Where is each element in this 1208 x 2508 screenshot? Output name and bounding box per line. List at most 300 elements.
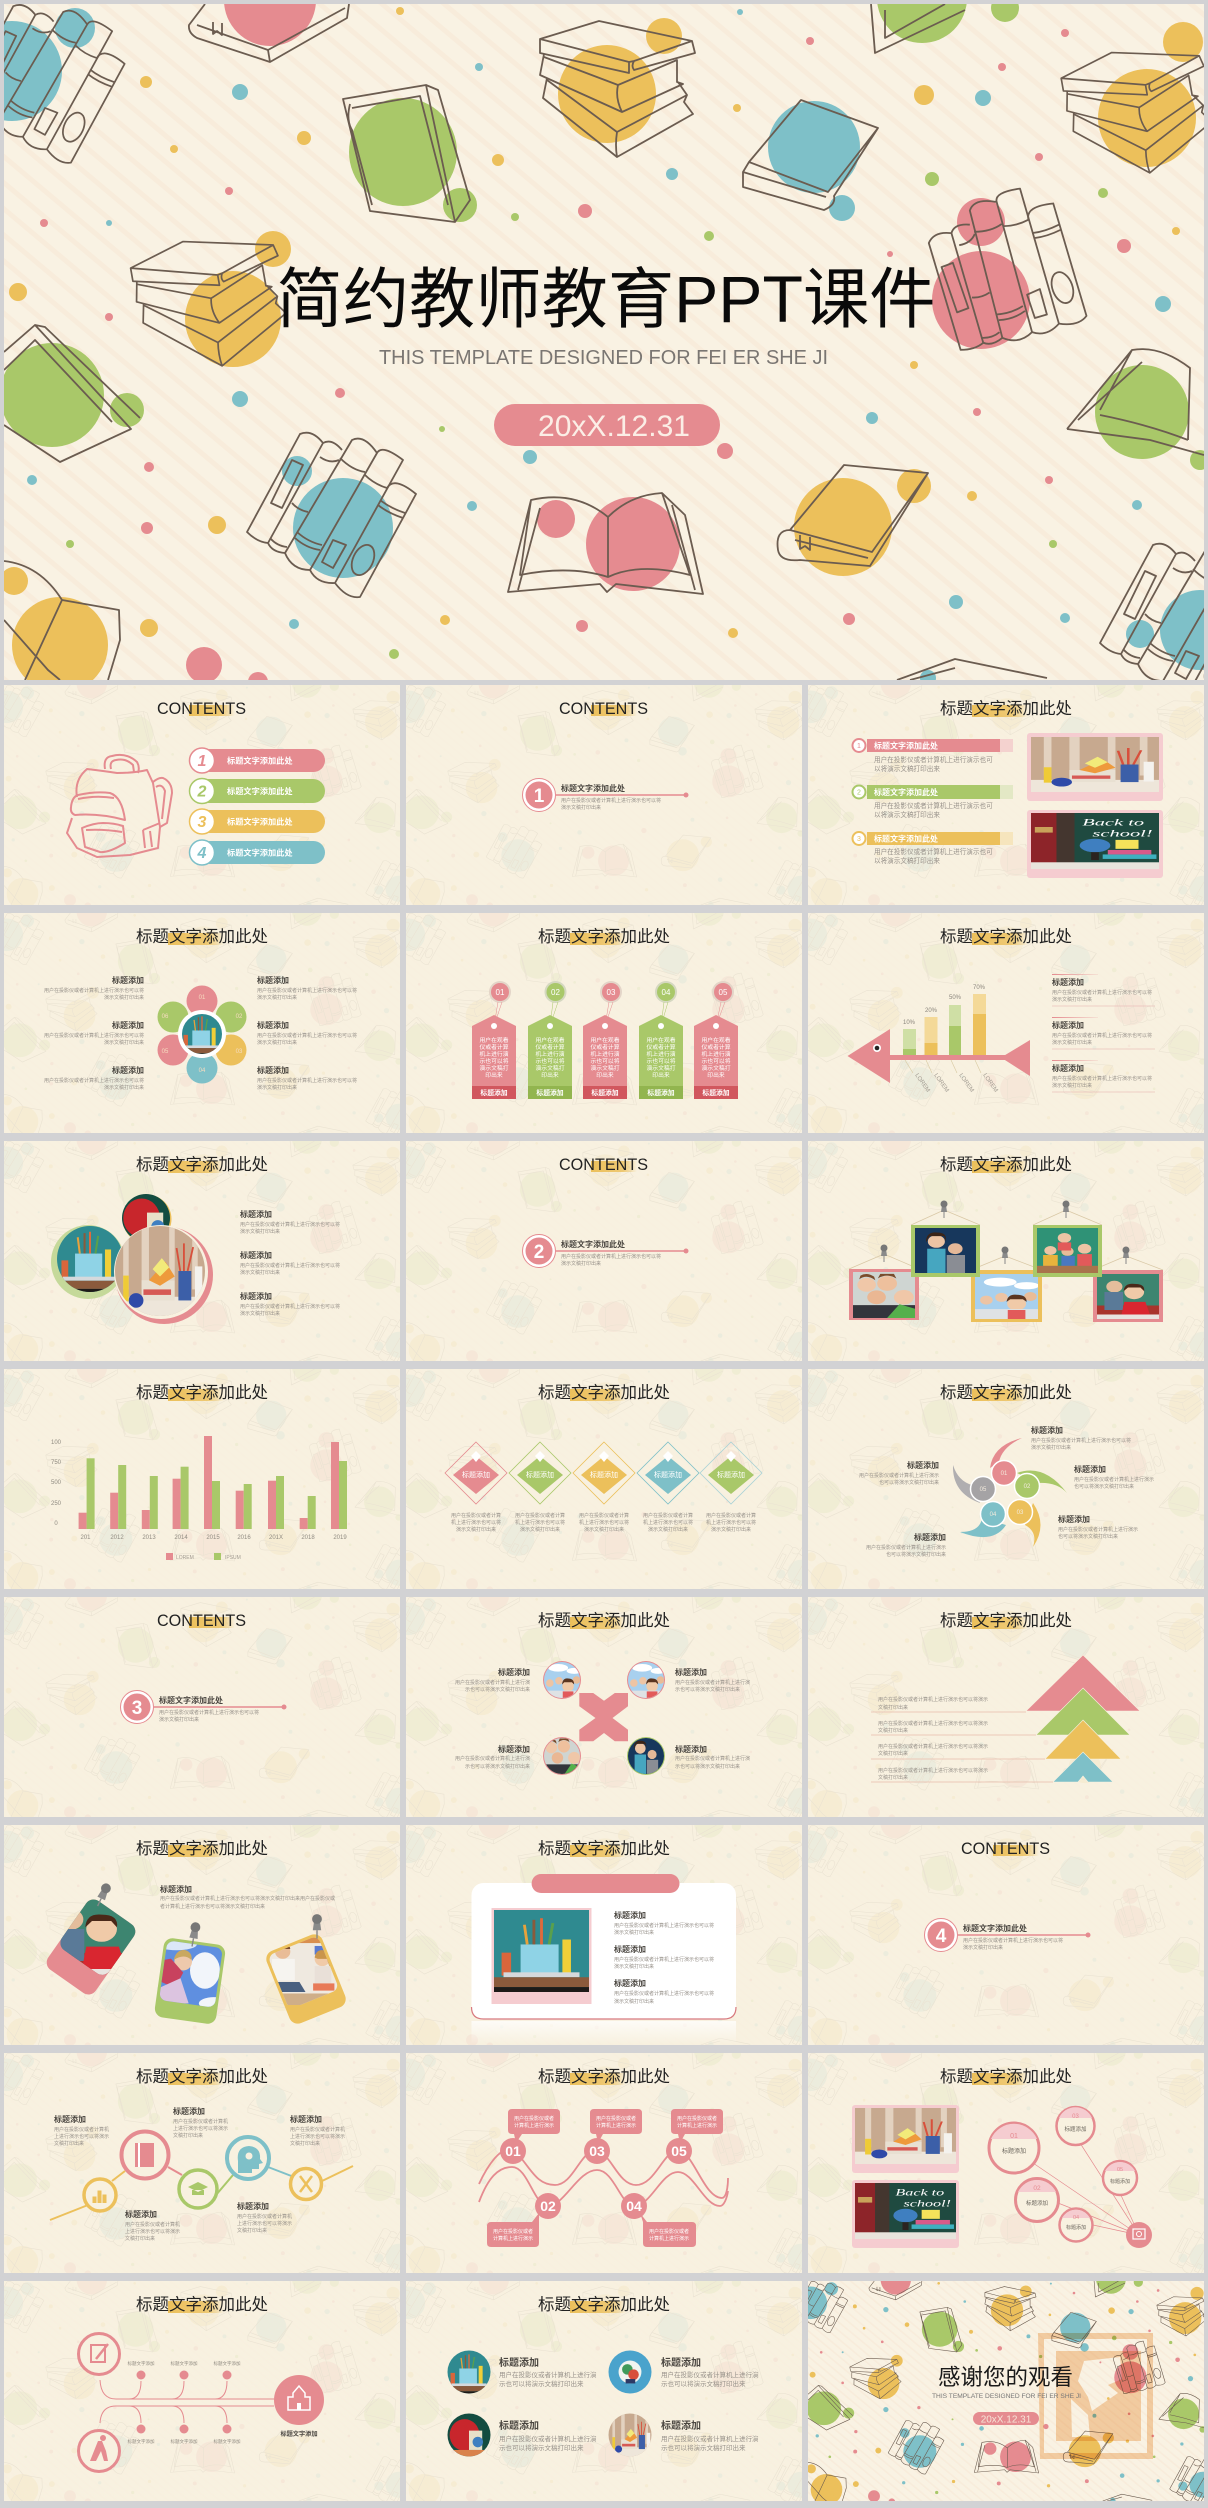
panel: slide 9 pinned photo wall xyxy=(794,1124,1208,1370)
left labels: 用户在投影仪或者计算机上进行演示也可以将 xyxy=(44,987,144,994)
diamond 4: 标题添加 xyxy=(654,1470,682,1479)
tag 05: 仪或者计算 xyxy=(702,1043,731,1051)
text rows: 文稿打印出来 xyxy=(878,1704,908,1711)
panel: slide 19 timeline rings xyxy=(0,2036,421,2282)
list item 3: 3 xyxy=(198,814,207,831)
tag 04: 印出来 xyxy=(652,1071,670,1079)
node numbers: 02 xyxy=(540,2198,556,2214)
tag 03: 用户在观看 xyxy=(590,1036,620,1044)
right text blocks: 标题添加 xyxy=(240,1291,272,1301)
y axis labels: 250 xyxy=(51,1501,62,1507)
text blocks xyxy=(54,2106,345,2242)
text blocks: 文稿打印出来 xyxy=(54,2140,84,2147)
item top right xyxy=(608,2350,759,2394)
heading: 标题文字添加此处 xyxy=(136,927,268,946)
right labels: 演示文稿打印出来 xyxy=(257,994,297,1001)
tag 03: 03 xyxy=(607,988,616,997)
text blocks: 演示文稿打印出来 xyxy=(614,1929,654,1936)
tag 02 xyxy=(528,981,572,1099)
card 2 xyxy=(154,1937,229,2025)
right text blocks: 标题添加 xyxy=(1052,1020,1084,1030)
right text blocks: 演示文稿打印出来 xyxy=(1052,1082,1092,1089)
item 1: 1 xyxy=(857,743,861,750)
callout text xyxy=(493,2115,717,2242)
callout text: 用户在投影仪或者 xyxy=(493,2228,533,2235)
ring yellow cross xyxy=(290,2168,322,2200)
section entry: 演示文稿打印出来 xyxy=(963,1944,1003,1951)
photo: pencils in cup xyxy=(492,1908,592,2004)
text rows: 用户在投影仪或者计算机上进行演示也可以将演示 xyxy=(878,1767,988,1774)
diamond captions: 机上进行演示也可以将 xyxy=(706,1519,756,1526)
x axis labels: 2018 xyxy=(301,1535,315,1541)
fishbone bars xyxy=(903,994,986,1055)
callout text: 计算机上进行演示 xyxy=(514,2122,554,2129)
labels: 用户在投影仪或者计算机上进行演示也可以将 xyxy=(1031,1437,1131,1444)
node numbers: 04 xyxy=(990,1512,997,1518)
text rows: 用户在投影仪或者计算机上进行演示也可以将演示 xyxy=(878,1743,988,1750)
text blocks: 标题添加 xyxy=(614,1944,646,1954)
bar value labels xyxy=(903,985,986,1026)
heading: 标题文字添加此处 xyxy=(136,1383,268,1402)
icon: backpack xyxy=(67,755,172,857)
pinwheel nodes xyxy=(970,1460,1040,1526)
text blocks: 用户在投影仪或者计算机上进行演示也可以将 xyxy=(614,1990,714,1997)
section entry: 用户在投影仪或者计算机上进行演示也可以将 xyxy=(963,1937,1063,1944)
ring pink book xyxy=(122,2132,168,2178)
labels: 用户在投影仪或者计算机上进行演 xyxy=(675,1755,750,1762)
legend: LOREM xyxy=(176,1555,194,1561)
white card xyxy=(472,1883,736,2019)
labels: 示也可以将演示文稿打印出来 xyxy=(675,1686,740,1693)
section entry: 3 xyxy=(132,1698,142,1719)
section entry: 标题文字添加此处 xyxy=(561,783,625,793)
heading: 标题文字添加此处 xyxy=(538,927,670,946)
bar value labels: 20% xyxy=(925,1008,938,1014)
right labels: 标题添加 xyxy=(257,975,289,985)
heading: 标题文字添加此处 xyxy=(538,1383,670,1402)
right labels: 标题添加 xyxy=(257,1065,289,1075)
item top right: 标题添加 xyxy=(661,2356,701,2369)
item 2: 2 xyxy=(857,790,861,796)
bottom dots and labels xyxy=(128,2424,241,2445)
labels: 用户在投影仪或者计算机上进行演 xyxy=(455,1679,530,1686)
text blocks: 用户在投影仪或者计算机 xyxy=(125,2221,180,2228)
item 1: 用户在投影仪或者计算机上进行演示也可 xyxy=(874,755,993,764)
tag 05: 05 xyxy=(719,988,728,997)
photo: yellow frame xyxy=(971,1270,1042,1322)
date pill xyxy=(973,2412,1039,2426)
x axis labels: 2016 xyxy=(237,1535,251,1541)
labels: 示也可以将演示文稿打印出来 xyxy=(675,1763,740,1770)
section entry xyxy=(120,1690,286,1724)
text rows: 文稿打印出来 xyxy=(878,1727,908,1734)
heading: CONTENTS xyxy=(559,1155,648,1174)
right text blocks xyxy=(1052,974,1155,1092)
text blocks: 文稿打印出来 xyxy=(290,2140,320,2147)
text blocks: 标题添加 xyxy=(125,2209,157,2219)
text blocks: 上进行演示也可以将演示 xyxy=(290,2133,345,2140)
callout text: 计算机上进行演示 xyxy=(677,2122,717,2129)
diamond 4 xyxy=(637,1442,699,1504)
bar value labels: 50% xyxy=(949,995,962,1001)
section entry: 用户在投影仪或者计算机上进行演示也可以将 xyxy=(561,1253,661,1260)
tag 01: 印出来 xyxy=(485,1071,503,1079)
photo: right pink frame xyxy=(1093,1270,1163,1322)
tag 01: 演示文稿打 xyxy=(480,1064,509,1072)
panel: slide 24 thank you xyxy=(794,2264,1208,2508)
tag 04 xyxy=(639,981,683,1099)
bottom dots and labels: 标题文字添加 xyxy=(214,2438,241,2445)
date pill: 20xX.12.31 xyxy=(538,410,690,443)
item 1: 标题文字添加此处 xyxy=(874,740,938,750)
x axis labels xyxy=(80,1535,347,1541)
tag 04: 用户在观看 xyxy=(646,1036,676,1044)
heading: 标题文字添加此处 xyxy=(940,2067,1072,2086)
ring green cap xyxy=(179,2170,217,2208)
large circle with building icon xyxy=(274,2375,324,2438)
diamond 1: 标题添加 xyxy=(462,1470,490,1479)
left labels: 标题添加 xyxy=(112,975,144,985)
item top left: 示也可以将演示文稿打印出来 xyxy=(499,2379,584,2388)
left labels: 用户在投影仪或者计算机上进行演示也可以将 xyxy=(44,1077,144,1084)
tag 02: 标题添加 xyxy=(536,1088,564,1097)
tag 02: 机上进行演 xyxy=(536,1050,565,1058)
text blocks: 标题添加 xyxy=(54,2114,86,2124)
subtitle: THIS TEMPLATE DESIGNED FOR FEI ER SHE JI xyxy=(379,347,828,369)
tag 01: 标题添加 xyxy=(480,1088,508,1097)
flower petals xyxy=(158,986,246,1084)
photo circle top left xyxy=(543,1661,582,1699)
list item 4: 标题文字添加此处 xyxy=(227,848,293,858)
ring yellow chart xyxy=(84,2179,116,2211)
right labels xyxy=(257,975,357,1091)
diamond captions: 机上进行演示也可以将 xyxy=(579,1519,629,1526)
item top left xyxy=(447,2350,597,2394)
section entry: 标题文字添加此处 xyxy=(963,1923,1027,1933)
flower petals: 05 xyxy=(162,1049,169,1055)
panel: slide 21 photos and node map xyxy=(794,2036,1208,2282)
node 04: 标题添加 xyxy=(1066,2224,1086,2231)
two wave lines xyxy=(479,2149,728,2206)
tag 04: 标题添加 xyxy=(647,1088,675,1097)
labels: 也可以将演示文稿打印出来 xyxy=(879,1479,939,1486)
right text blocks: 标题添加 xyxy=(1052,1063,1084,1073)
section entry xyxy=(924,1918,1090,1952)
heading: 标题文字添加此处 xyxy=(136,2295,268,2314)
node numbers: 02 xyxy=(1024,1484,1031,1490)
list item 2: 标题文字添加此处 xyxy=(227,786,293,796)
left labels: 标题添加 xyxy=(112,1020,144,1030)
left labels: 用户在投影仪或者计算机上进行演示也可以将 xyxy=(44,1032,144,1039)
bar series ipsum xyxy=(87,1458,347,1529)
item 3: 标题文字添加此处 xyxy=(874,834,938,844)
connectors xyxy=(1033,2143,1139,2235)
photo circle top right xyxy=(627,1661,666,1699)
tag 04: 仪或者计算 xyxy=(646,1043,676,1051)
labels: 用户在投影仪或者计算机上进行演示 xyxy=(1058,1526,1138,1533)
top pink clip xyxy=(532,1874,680,1893)
right text blocks: 用户在投影仪或者计算机上进行演示也可以将 xyxy=(1052,1075,1152,1082)
tag 05: 印出来 xyxy=(707,1071,725,1079)
item top left: 标题添加 xyxy=(499,2356,539,2369)
text rows: 文稿打印出来 xyxy=(878,1774,908,1781)
section entry: 演示文稿打印出来 xyxy=(159,1716,199,1723)
item 3: 3 xyxy=(857,836,861,843)
tag 01: 仪或者计算 xyxy=(480,1043,509,1051)
left labels: 演示文稿打印出来 xyxy=(104,994,144,1001)
callout text: 用户在投影仪或者 xyxy=(596,2115,636,2122)
diamond captions: 演示文稿打印出来 xyxy=(520,1526,560,1533)
list item 4 xyxy=(189,840,325,865)
y axis labels: 500 xyxy=(51,1480,62,1486)
item 3: 以将演示文稿打印出来 xyxy=(874,856,940,865)
diamond captions xyxy=(451,1512,756,1533)
right text blocks: 标题添加 xyxy=(1052,977,1084,987)
tag 04: 演示文稿打 xyxy=(646,1064,676,1072)
right text blocks: 用户在投影仪或者计算机上进行演示也可以将 xyxy=(1052,1032,1152,1039)
node numbers: 04 xyxy=(626,2198,642,2214)
panel: slide 10 bar chart xyxy=(0,1352,421,1598)
text blocks xyxy=(614,1910,714,2005)
number nodes xyxy=(500,2138,692,2219)
list item 3 xyxy=(189,809,325,834)
panel: slide 16 pinned rotated cards xyxy=(4,1825,400,2045)
tag 01 xyxy=(472,981,516,1099)
icon ring top xyxy=(78,2334,120,2374)
top dots and labels: 标题文字添加 xyxy=(214,2360,241,2367)
diamond captions: 演示文稿打印出来 xyxy=(584,1526,624,1533)
text blocks: 标题添加 xyxy=(614,1910,646,1920)
panel: slide 7 overlapping circle photos xyxy=(4,1141,400,1361)
tag 05 xyxy=(694,981,738,1099)
pins xyxy=(93,1882,322,1947)
diamond captions: 用户在投影仪或者计算 xyxy=(643,1512,693,1519)
text blocks: 文稿打印出来 xyxy=(237,2227,267,2234)
text blocks: 上进行演示也可以将演示 xyxy=(173,2125,228,2132)
diamond captions: 用户在投影仪或者计算 xyxy=(579,1512,629,1519)
diamond 5 xyxy=(700,1442,762,1504)
diamond captions: 演示文稿打印出来 xyxy=(711,1526,751,1533)
tag 05: 演示文稿打 xyxy=(702,1064,731,1072)
text block: 用户在投影仪或者计算机上进行演示也可以将演示文稿打印出来用户在投影仪或 xyxy=(160,1895,335,1902)
photo circle left xyxy=(51,1225,125,1299)
tag 04: 示也可以将 xyxy=(646,1057,676,1065)
node 03 xyxy=(1056,2107,1094,2145)
section entry: 1 xyxy=(534,786,545,807)
text block: 者计算机上进行演示也可以将演示文稿打印出来 xyxy=(160,1903,265,1910)
labels: 标题添加 xyxy=(1031,1425,1063,1435)
center photo xyxy=(178,1010,226,1058)
bar value labels: 70% xyxy=(973,985,986,991)
triangle pyramid xyxy=(1026,1655,1140,1782)
heading: 标题文字添加此处 xyxy=(136,1839,268,1858)
callout text: 计算机上进行演示 xyxy=(596,2122,636,2129)
panel: hero cover slide xyxy=(0,0,1208,708)
top dots and labels: 标题文字添加 xyxy=(128,2360,155,2367)
callout text: 计算机上进行演示 xyxy=(493,2235,533,2242)
section entry: 2 xyxy=(534,1242,544,1263)
section entry: 演示文稿打印出来 xyxy=(561,804,601,811)
bar series lorem xyxy=(79,1436,339,1529)
bar value labels: 10% xyxy=(903,1020,916,1026)
labels: 示也可以将演示文稿打印出来 xyxy=(465,1763,530,1770)
panel: slide 23 circle image list xyxy=(406,2281,802,2501)
diamond 3 xyxy=(573,1442,635,1504)
item top left: 用户在投影仪或者计算机上进行演 xyxy=(499,2370,597,2379)
tag 02: 02 xyxy=(551,988,560,997)
card reflection xyxy=(472,2021,736,2044)
flower petals: 02 xyxy=(236,1014,243,1020)
diamond 3: 标题添加 xyxy=(590,1470,618,1479)
labels: 也可以将演示文稿打印出来 xyxy=(1058,1533,1118,1540)
tag 05: 机上进行演 xyxy=(702,1050,731,1058)
text rows: 用户在投影仪或者计算机上进行演示也可以将演示 xyxy=(878,1696,988,1703)
callout text: 用户在投影仪或者 xyxy=(649,2228,689,2235)
right text blocks: 标题添加 xyxy=(240,1250,272,1260)
item 1 xyxy=(852,739,1013,773)
heading: CONTENTS xyxy=(157,699,246,718)
diamond captions: 机上进行演示也可以将 xyxy=(451,1519,501,1526)
labels: 标题添加 xyxy=(675,1744,707,1754)
icon ring bottom xyxy=(78,2430,120,2472)
x axis labels: 2013 xyxy=(142,1535,156,1541)
panel: slide 1 contents with backpack xyxy=(0,668,421,914)
right labels: 标题添加 xyxy=(257,1020,289,1030)
tag 01: 01 xyxy=(496,988,505,997)
tag 02: 印出来 xyxy=(541,1071,559,1079)
photo circle bottom left xyxy=(543,1737,581,1775)
node numbers: 03 xyxy=(1017,1510,1024,1516)
item 2: 标题文字添加此处 xyxy=(874,787,938,797)
rotated category labels: LOREM xyxy=(913,1073,931,1094)
y axis labels: 100 xyxy=(51,1440,62,1446)
panel: slide 14 four circles xyxy=(406,1597,802,1817)
item 1: 以将演示文稿打印出来 xyxy=(874,764,940,773)
subtitle: THIS TEMPLATE DESIGNED FOR FEI ER SHE JI xyxy=(932,2393,1081,2400)
panel: slide 6 fishbone chart xyxy=(794,896,1208,1142)
list item 3: 标题文字添加此处 xyxy=(227,816,293,826)
right text blocks: 用户在投影仪或者计算机上进行演示也可以将 xyxy=(1052,989,1152,996)
node 05: 标题添加 xyxy=(1110,2178,1130,2185)
node 04 xyxy=(1060,2208,1092,2242)
callout text: 用户在投影仪或者 xyxy=(514,2115,554,2122)
diamond captions: 演示文稿打印出来 xyxy=(648,1526,688,1533)
diamond 1 xyxy=(445,1442,507,1504)
text blocks: 文稿打印出来 xyxy=(125,2235,155,2242)
x axis labels: 201X xyxy=(269,1535,283,1541)
tag 03: 印出来 xyxy=(596,1071,614,1079)
panel: slide 15 stacked triangles xyxy=(794,1580,1208,1826)
text blocks: 用户在投影仪或者计算机上进行演示也可以将 xyxy=(614,1922,714,1929)
pinwheel tails xyxy=(953,1438,1067,1547)
text rows xyxy=(878,1696,988,1781)
labels: 示也可以将演示文稿打印出来 xyxy=(465,1686,530,1693)
photo: school supplies xyxy=(1027,733,1163,801)
tag 05: 用户在观看 xyxy=(702,1036,731,1044)
labels: 用户在投影仪或者计算机上进行演 xyxy=(675,1679,750,1686)
rotated category labels: LOREM xyxy=(932,1073,950,1094)
legend: IPSUM xyxy=(225,1555,241,1561)
orange watermark icon xyxy=(1038,2333,1153,2459)
panel: slide 17 white clipboard card xyxy=(392,1808,823,2054)
diamond 2 xyxy=(509,1442,571,1504)
node numbers xyxy=(980,1471,1031,1518)
text rows: 用户在投影仪或者计算机上进行演示也可以将演示 xyxy=(878,1720,988,1727)
node numbers xyxy=(505,2143,687,2214)
labels: 用户在投影仪或者计算机上进行演示 xyxy=(1074,1476,1154,1483)
right text blocks: 用户在投影仪或者计算机上进行演示也可以将 xyxy=(240,1221,340,1228)
callouts xyxy=(487,2109,723,2247)
panel: slide 13 section three xyxy=(0,1580,421,1826)
node 01 xyxy=(989,2123,1039,2173)
item top right: 示也可以将演示文稿打印出来 xyxy=(661,2379,746,2388)
text block xyxy=(160,1884,335,1910)
heading: 标题文字添加此处 xyxy=(136,2067,268,2086)
x axis labels: 2012 xyxy=(110,1535,124,1541)
list item 4: 4 xyxy=(197,845,207,862)
diamond captions: 机上进行演示也可以将 xyxy=(643,1519,693,1526)
photo: blackboard xyxy=(852,2180,959,2248)
node 02 xyxy=(1016,2178,1058,2222)
node 05 xyxy=(1103,2161,1137,2195)
tag 03: 标题添加 xyxy=(591,1088,619,1097)
tag 03: 机上进行演 xyxy=(590,1050,620,1058)
right labels: 用户在投影仪或者计算机上进行演示也可以将 xyxy=(257,1077,357,1084)
item bottom right: 标题添加 xyxy=(661,2419,701,2432)
icon: solid hub xyxy=(1126,2222,1152,2248)
list item 1: 1 xyxy=(198,753,207,770)
x axis labels: 2019 xyxy=(333,1535,347,1541)
text blocks: 标题添加 xyxy=(173,2106,205,2116)
node numbers: 01 xyxy=(1001,1471,1008,1477)
item top right: 用户在投影仪或者计算机上进行演 xyxy=(661,2370,759,2379)
item bottom left: 示也可以将演示文稿打印出来 xyxy=(499,2443,584,2452)
ring blue head xyxy=(227,2137,269,2179)
top dots and labels: 标题文字添加 xyxy=(170,2360,198,2367)
heading: CONTENTS xyxy=(559,699,648,718)
thank you title: 感谢您的观看 xyxy=(938,2365,1073,2390)
right labels: 演示文稿打印出来 xyxy=(257,1039,297,1046)
rotated category labels xyxy=(905,1060,999,1094)
right labels: 用户在投影仪或者计算机上进行演示也可以将 xyxy=(257,987,357,994)
legend xyxy=(166,1553,241,1561)
panel: slide 3 items with photos xyxy=(794,668,1208,914)
text blocks: 上进行演示也可以将演示 xyxy=(237,2220,292,2227)
y axis labels: 0 xyxy=(54,1521,58,1527)
text block: 标题添加 xyxy=(160,1884,192,1894)
text blocks: 上进行演示也可以将演示 xyxy=(54,2133,109,2140)
center cross shape xyxy=(579,1693,628,1741)
card 1 xyxy=(46,1900,136,1994)
flower petals: 03 xyxy=(236,1049,243,1055)
item bottom right: 示也可以将演示文稿打印出来 xyxy=(661,2443,746,2452)
panel: slide 22 branching flow xyxy=(0,2264,421,2508)
rotated category labels: LOREM xyxy=(957,1073,975,1094)
illustrated book pattern background xyxy=(0,0,1208,708)
panel: slide 2 section one xyxy=(392,668,823,914)
text blocks: 演示文稿打印出来 xyxy=(614,1963,654,1970)
text blocks: 用户在投影仪或者计算机上进行演示也可以将 xyxy=(614,1956,714,1963)
labels: 用户在投影仪或者计算机上进行演示 xyxy=(859,1472,939,1479)
item 2: 以将演示文稿打印出来 xyxy=(874,810,940,819)
rotated category labels: LOREM xyxy=(981,1073,999,1094)
labels: 也可以将演示文稿打印出来 xyxy=(1074,1483,1134,1490)
title: 简约教师教育PPT课件 xyxy=(276,262,936,336)
bottom dots and labels: 标题文字添加 xyxy=(128,2438,155,2445)
heading: 标题文字添加此处 xyxy=(940,1611,1072,1630)
photo circle top xyxy=(122,1194,172,1237)
photo: green frame left xyxy=(911,1225,980,1277)
